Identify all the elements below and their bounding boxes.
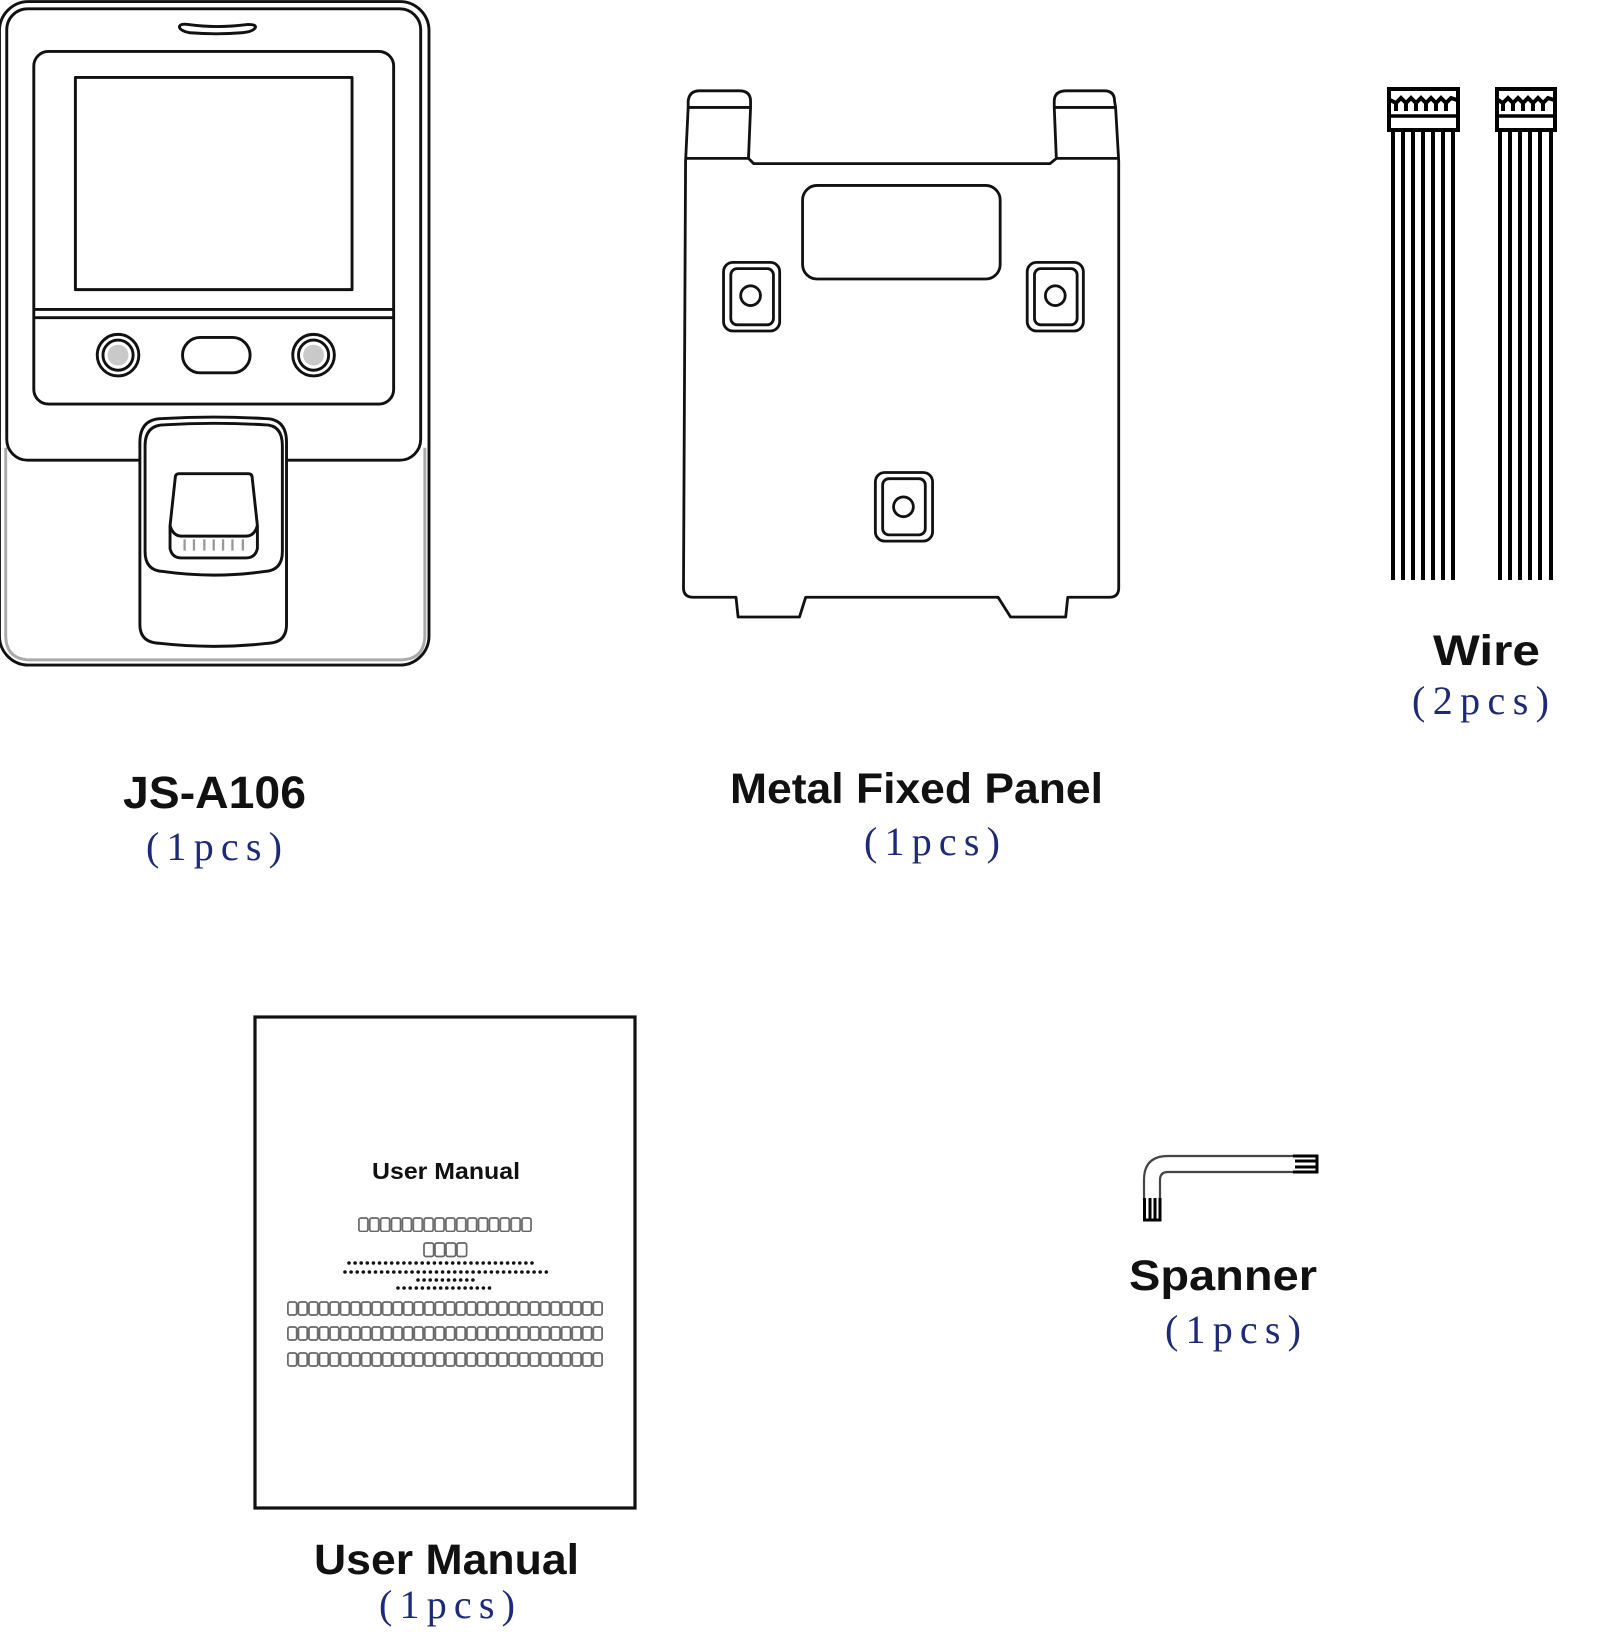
quantity: (1pcs) <box>379 1582 515 1627</box>
quantity: (1pcs) <box>1165 1307 1301 1352</box>
label: User Manual: User Manual <box>314 1536 579 1584</box>
label: JS-A106: JS-A106 <box>123 767 306 818</box>
label: JS-A106 <box>123 767 306 869</box>
placeholder box rows <box>287 1217 603 1368</box>
user manual booklet <box>255 1017 635 1508</box>
label: User Manual <box>314 1536 579 1627</box>
device illustration: JS-A106 terminal <box>0 2 429 665</box>
quantity: (1pcs) <box>146 824 282 869</box>
wire 1 <box>1389 89 1458 580</box>
manual cover title: User Manual <box>372 1158 520 1184</box>
label: Metal Fixed Panel: Metal Fixed Panel <box>730 765 1103 813</box>
label: Wire <box>1412 627 1549 723</box>
metal fixed panel illustration <box>683 91 1119 617</box>
spanner illustration <box>1144 1156 1317 1220</box>
label: Spanner <box>1129 1252 1317 1352</box>
label: Metal Fixed Panel <box>730 765 1103 864</box>
quantity: (1pcs) <box>864 819 1000 864</box>
wire illustration: two connectors with leads <box>1389 89 1555 580</box>
wire 2 <box>1497 89 1555 580</box>
quantity: (2pcs) <box>1412 678 1549 723</box>
label: Wire: Wire <box>1433 627 1540 675</box>
label: Spanner: Spanner <box>1129 1252 1317 1300</box>
